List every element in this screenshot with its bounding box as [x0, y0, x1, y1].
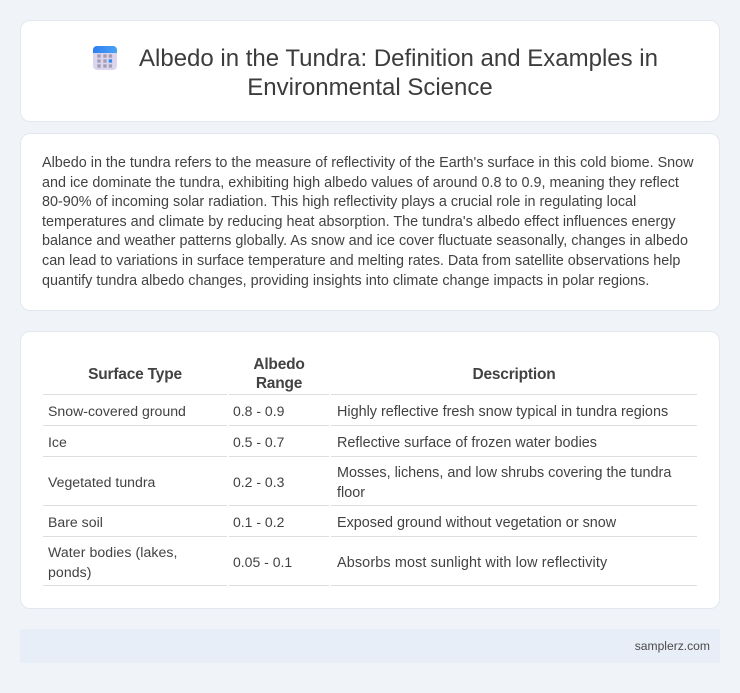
- row: vegetated tundra: [48, 465, 672, 501]
- footer bar: [20, 629, 720, 663]
- icon: calendar: [93, 46, 117, 70]
- footer source text: samplerz.com: [635, 639, 710, 653]
- text block: definition: can lead to variations in surface temperature and melting rates. Data from satellite observations help: [42, 253, 680, 269]
- table header: albedo range: Albedo: [253, 356, 305, 373]
- row: vegetated tundra: Vegetated tundra: [48, 474, 155, 490]
- row: vegetated tundra: Mosses, lichens, and low shrubs covering the tundra: [337, 465, 671, 481]
- row: vegetated tundra: floor: [337, 485, 365, 501]
- row: water bodies: ponds): [48, 564, 92, 580]
- text block: definition: temperatures and climate by reducing heat absorption. The tundra's albedo effect influences energy: [42, 214, 676, 230]
- panel: intro paragraph: [20, 133, 720, 311]
- text block: definition: quantify tundra albedo changes, providing insights into climate change impacts in polar regions.: [42, 273, 649, 289]
- text block: definition: Albedo in the tundra refers to the measure of reflectivity of the Earth's surface in this cold biome. Snow: [42, 155, 694, 171]
- table header: description: Description: [472, 366, 556, 383]
- title: Albedo in the Tundra: Definition and Examples in: [139, 45, 658, 72]
- row: ice: Ice: [48, 434, 67, 450]
- row: vegetated tundra: 0.2 - 0.3: [233, 474, 284, 490]
- title: Environmental Science: [247, 74, 493, 101]
- row: snow-covered ground: [48, 403, 668, 420]
- row: bare soil: 0.1 - 0.2: [233, 514, 284, 530]
- row: ice: Reflective surface of frozen water bodies: [337, 435, 597, 451]
- panel: albedo table: [20, 331, 720, 609]
- row: water bodies: Water bodies (lakes,: [48, 544, 178, 560]
- row: ice: 0.5 - 0.7: [233, 434, 284, 450]
- text block: definition: and ice dominate the tundra, exhibiting high albedo values of around 0.8 to 0.9, meaning they reflect: [42, 175, 679, 191]
- text block: definition: [42, 155, 694, 289]
- table header: surface type: Surface Type: [88, 366, 182, 383]
- row: water bodies: Absorbs most sunlight with low reflectivity: [337, 555, 607, 571]
- row: bare soil: Exposed ground without vegetation or snow: [337, 515, 616, 531]
- row: bare soil: Bare soil: [48, 514, 103, 530]
- row: snow-covered ground: Highly reflective fresh snow typical in tundra regions: [337, 404, 668, 420]
- panel: title card: [20, 20, 720, 122]
- table header: albedo range: [253, 356, 305, 392]
- table header: albedo range: Range: [256, 375, 302, 392]
- title: [139, 45, 658, 101]
- row: snow-covered ground: 0.8 - 0.9: [233, 403, 284, 419]
- row: bare soil: [48, 514, 616, 531]
- text block: definition: 80-90% of incoming solar radiation. This high reflectivity plays a crucial role in regulating local: [42, 194, 636, 210]
- row: ice: [48, 434, 597, 451]
- row: water bodies: [48, 544, 608, 580]
- row: water bodies: 0.05 - 0.1: [233, 554, 292, 570]
- text block: definition: balance and weather patterns globally. As snow and ice cover fluctuate seasonally, changes in albedo: [42, 233, 688, 249]
- row: snow-covered ground: Snow-covered ground: [48, 403, 186, 419]
